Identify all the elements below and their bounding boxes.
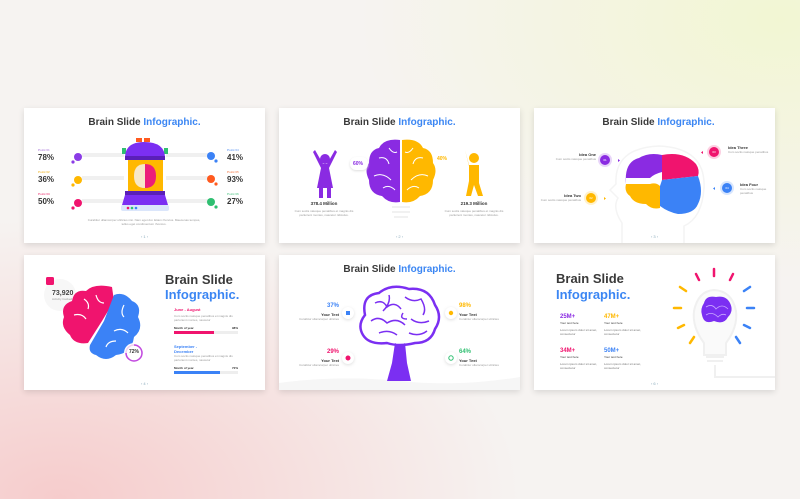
- period 2: 72%: [232, 366, 238, 370]
- right stats: [227, 148, 243, 206]
- title: Brain Slide: [556, 271, 624, 286]
- item 37: 37%: [327, 303, 339, 309]
- item 29: Your Text: [321, 358, 339, 363]
- idea two: Idea Two: [564, 193, 581, 198]
- stat right: 219.3 Million: [461, 201, 487, 206]
- period 2: Month of year: [174, 366, 194, 370]
- slide 6: lightbulb brain: Lorem ipsum dolor sit amet, consectetur: [604, 328, 641, 336]
- brain and figures: [313, 140, 483, 218]
- left stats: Point 03: [38, 192, 50, 196]
- left stats: [38, 148, 54, 206]
- title: Infographic.: [556, 287, 630, 302]
- right stats: Point 04: [227, 148, 239, 152]
- stat left: [294, 201, 354, 217]
- title: [165, 272, 239, 302]
- idea three: Cum sociis natoque penatibus: [728, 150, 768, 154]
- tree brain: [279, 286, 520, 390]
- item 29: 29%: [327, 349, 339, 355]
- left stats: 36%: [38, 175, 54, 184]
- slide 6: lightbulb brain: Lorem ipsum dolor sit amet, consectetur: [560, 328, 597, 336]
- title: Brain Slide Infographic.: [88, 117, 201, 128]
- period 1: 98%: [232, 326, 238, 330]
- slide 6: lightbulb brain: 47M+: [604, 314, 619, 320]
- stat left: 378.4 Million: [311, 201, 337, 206]
- stat right: Cum sociis natoque penatibus et magnis dis parturient montes, nascetur ridiculus.: [445, 209, 503, 217]
- item 98: [459, 302, 499, 321]
- right stats: Point 05: [227, 170, 239, 174]
- item 64: Curabitur ullamcorper ultricies: [459, 363, 499, 367]
- slide 6: lightbulb brain: 50M+: [604, 348, 619, 354]
- slide 6: lightbulb brain: 34M+: [560, 348, 575, 354]
- title: Brain Slide: [165, 272, 233, 287]
- item 37: Your Text: [321, 312, 339, 317]
- period 1: June - August: [174, 307, 201, 312]
- slide 2: two halves brain: [279, 108, 520, 243]
- period 1: Month of year: [174, 326, 194, 330]
- idea two: Cum sociis natoque penatibus: [541, 198, 581, 202]
- pager: ‹ 2 ›: [396, 234, 403, 239]
- idea four: [740, 182, 766, 195]
- slide 6: lightbulb brain: Your text here: [560, 355, 579, 359]
- item 64: [459, 348, 499, 367]
- slide 3: puzzle brain: [534, 108, 775, 243]
- item 64: Your Text: [459, 358, 477, 363]
- title: [556, 271, 630, 302]
- slide 6: lightbulb brain: [534, 255, 775, 390]
- left stats: Point 02: [38, 170, 50, 174]
- pager: ‹ 1 ›: [141, 234, 148, 239]
- idea one: [556, 152, 596, 161]
- pager: ‹ 3 ›: [651, 234, 658, 239]
- period 2: [174, 344, 238, 374]
- item 98: 98%: [459, 303, 471, 309]
- title: Brain Slide Infographic.: [343, 264, 456, 275]
- head and puzzle brain: 04: [725, 186, 729, 190]
- item 98: Curabitur ullamcorper ultricies: [459, 317, 499, 321]
- pager: ‹ 6 ›: [651, 381, 658, 386]
- item 98: Your Text: [459, 312, 477, 317]
- left stats: 50%: [38, 197, 54, 206]
- item 37: Curabitur ullamcorper ultricies: [299, 317, 339, 321]
- stats grid: [560, 314, 641, 370]
- caption: Curabitur ullamcorper ultricies nisi. Nam eget dui. Etiam rhoncus. Maecenas tempus, tellus eget condimentum rhoncus.: [88, 218, 200, 226]
- period 2: December: [174, 349, 193, 354]
- left stats: Point 01: [38, 148, 50, 152]
- slide 4: split brain with progress: [24, 255, 265, 390]
- idea four: Idea Four: [740, 182, 758, 187]
- pager: ‹ 4 ›: [141, 381, 148, 386]
- title: Infographic.: [165, 287, 239, 302]
- slide 6: lightbulb brain: Your text here: [604, 321, 623, 325]
- lantern graphic: [71, 138, 218, 211]
- period 2: September -: [174, 344, 197, 349]
- item 64: 64%: [459, 349, 471, 355]
- slide 6: lightbulb brain: 25M+: [560, 314, 575, 320]
- head and puzzle brain: 01: [603, 158, 607, 162]
- slide 6: lightbulb brain: Your text here: [560, 321, 579, 325]
- idea three: Idea Three: [728, 145, 748, 150]
- period 1: [174, 307, 238, 334]
- brain graphic: [46, 277, 143, 362]
- right stats: 93%: [227, 175, 243, 184]
- idea three: [728, 145, 768, 154]
- idea two: [540, 193, 581, 202]
- counter: Activity tracked: [52, 297, 72, 301]
- slide 1: lantern brain: [24, 108, 265, 243]
- item 37: [299, 302, 339, 321]
- head and puzzle brain: 03: [712, 150, 716, 154]
- right stats: 41%: [227, 153, 243, 162]
- stat left: Cum sociis natoque penatibus et magnis dis parturient montes, nascetur ridiculus.: [295, 209, 353, 217]
- stat right: [444, 201, 504, 217]
- period 2: Cum sociis natoque penatibus et magnis dis parturient montes, nascetur: [174, 354, 233, 362]
- slide 6: lightbulb brain: Lorem ipsum dolor sit amet, consectetur: [560, 362, 597, 370]
- head and puzzle brain: [584, 145, 734, 243]
- gauge label: 72%: [129, 349, 139, 355]
- title: Brain Slide Infographic.: [343, 117, 456, 128]
- right stats: Point 06: [227, 192, 239, 196]
- idea one: Cum sociis natoque penatibus: [556, 157, 596, 161]
- slide 2: two halves brain: 40%: [437, 156, 447, 162]
- slide 5: brain tree: [279, 255, 520, 390]
- item 29: Curabitur ullamcorper ultricies: [299, 363, 339, 367]
- item 29: [299, 348, 339, 367]
- counter: 73,920: [52, 290, 73, 297]
- left stats: 78%: [38, 153, 54, 162]
- right stats: 27%: [227, 197, 243, 206]
- slide 6: lightbulb brain: Lorem ipsum dolor sit amet, consectetur: [604, 362, 641, 370]
- percent labels: 60%: [353, 161, 363, 167]
- idea one: Idea One: [579, 152, 596, 157]
- bulb graphic: [672, 268, 775, 378]
- counter: [52, 290, 74, 301]
- period 1: Cum sociis natoque penatibus et magnis dis parturient montes, nascetur: [174, 314, 233, 322]
- idea four: Cum sociis natoque penatibus: [740, 187, 766, 195]
- title: Brain Slide Infographic.: [602, 117, 715, 128]
- head and puzzle brain: 02: [589, 196, 593, 200]
- slide 6: lightbulb brain: Your text here: [604, 355, 623, 359]
